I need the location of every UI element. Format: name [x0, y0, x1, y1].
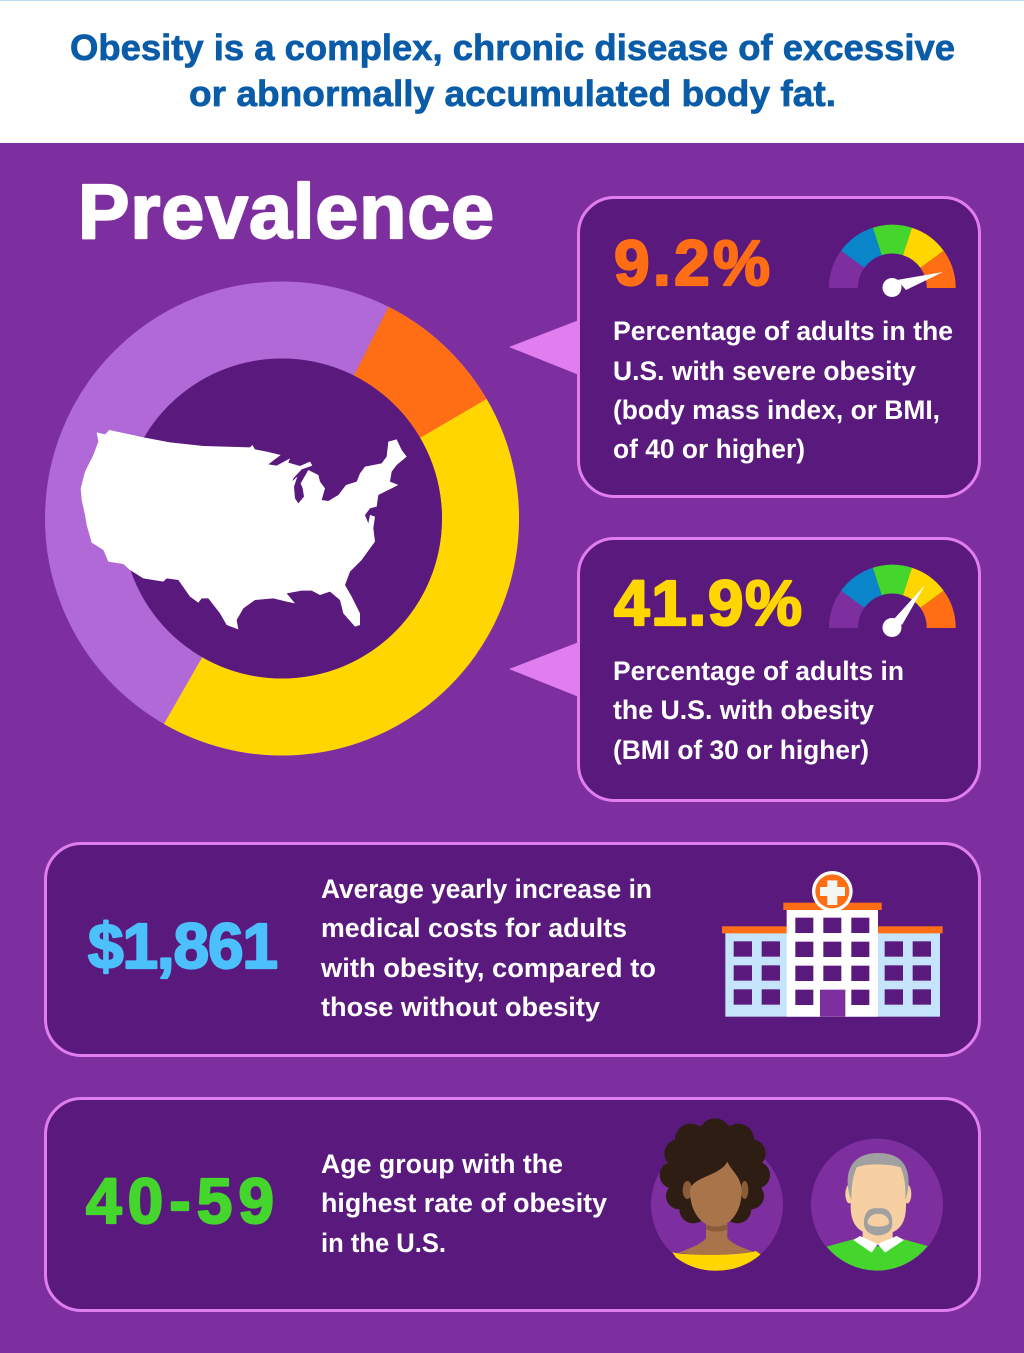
text: severe obesity description: Percentage of adults in the — [613, 316, 953, 346]
yellow segment: 41.9% — [164, 399, 519, 756]
stat: 41.9%: 41.9% — [614, 567, 802, 639]
icon: US map — [81, 430, 407, 629]
text: medical costs description: those without obesity — [321, 992, 600, 1022]
text: severe obesity description — [613, 316, 953, 464]
panel: severe obesity — [578, 198, 980, 496]
callout pointer: obesity — [509, 642, 579, 697]
title — [70, 27, 955, 114]
text: medical costs description: Average yearly increase in — [321, 874, 652, 904]
text: obesity description: Percentage of adults in — [613, 656, 904, 686]
icon: gauge high — [829, 225, 956, 297]
text: obesity description: (BMI of 30 or higher) — [613, 735, 869, 765]
stat: $1,861: $1,861 — [88, 910, 278, 982]
text: medical costs description — [320, 874, 656, 1022]
text: age group description: highest rate of obesity — [321, 1188, 607, 1218]
text: severe obesity description: U.S. with severe obesity — [613, 356, 916, 386]
donut chart — [81, 307, 519, 756]
icon: hospital — [722, 871, 943, 1017]
icon: gauge medium — [829, 565, 956, 637]
panel: age group — [46, 1098, 980, 1310]
text: age group description: in the U.S. — [321, 1228, 446, 1258]
panel: obesity — [578, 538, 980, 800]
title: or abnormally accumulated body fat. — [189, 73, 836, 114]
stat: 9.2%: 9.2% — [614, 227, 770, 299]
text: medical costs description: with obesity, compared to — [320, 953, 656, 983]
text: medical costs description: medical costs for adults — [321, 913, 627, 943]
title: Obesity is a complex, chronic disease of excessive — [70, 27, 955, 68]
panel: medical costs — [46, 844, 980, 1056]
text: age group description — [321, 1149, 607, 1258]
stat: 40-59: 40-59 — [86, 1165, 274, 1237]
icon: man — [811, 1139, 943, 1271]
callout pointer: severe obesity — [509, 320, 579, 375]
text: severe obesity description: of 40 or higher) — [613, 434, 805, 464]
text: obesity description: the U.S. with obesity — [613, 695, 874, 725]
orange segment: 9.2% — [354, 307, 487, 438]
hair — [660, 1118, 770, 1223]
heading: Prevalence: Prevalence — [78, 169, 494, 255]
text: age group description: Age group with the — [321, 1149, 563, 1179]
icon: woman — [651, 1118, 783, 1271]
text: severe obesity description: (body mass index, or BMI, — [613, 395, 940, 425]
text: obesity description — [613, 656, 904, 765]
